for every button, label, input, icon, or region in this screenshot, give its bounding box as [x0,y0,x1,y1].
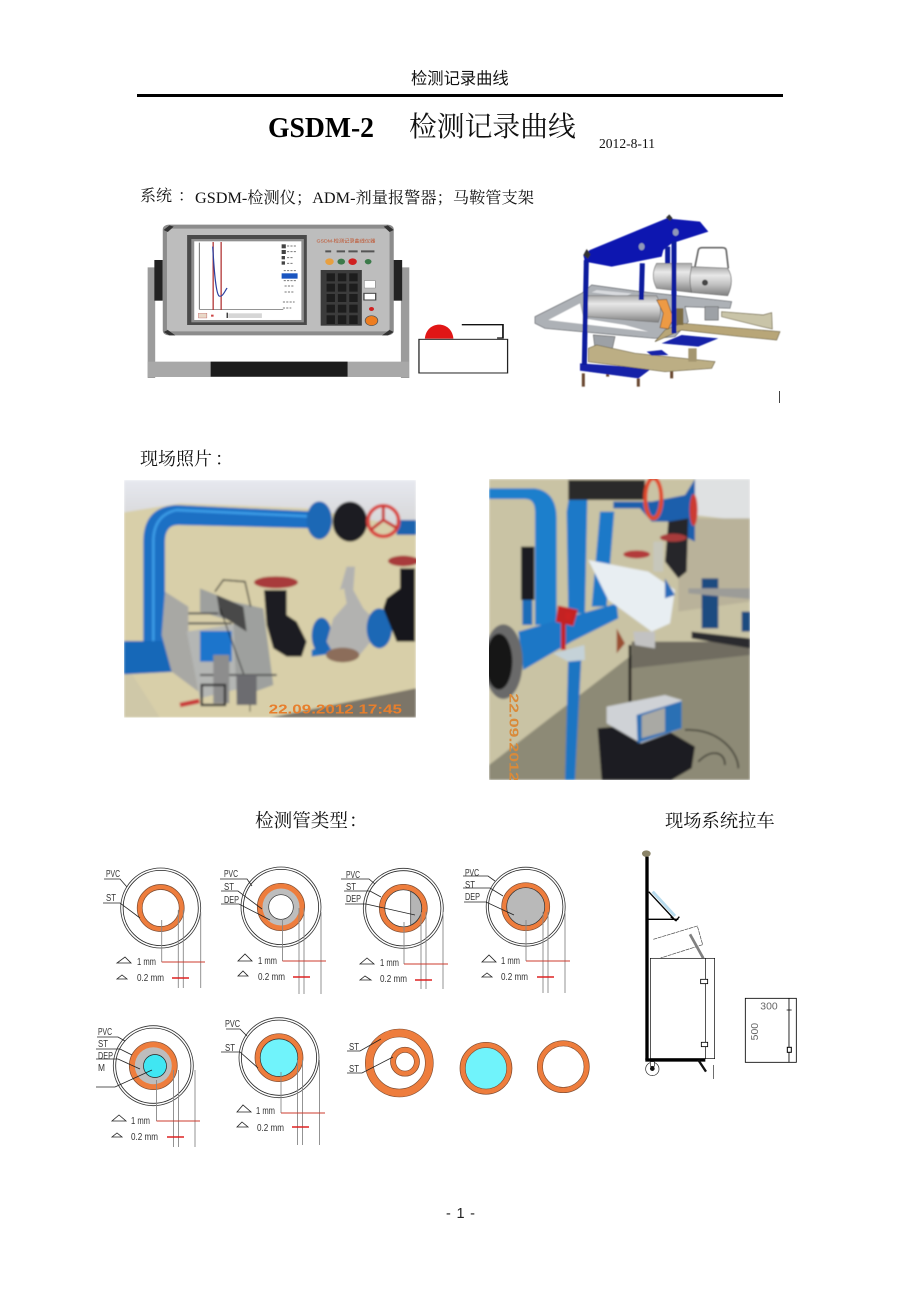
diagram: cart dimensions 300 by 500: 500 [750,1023,761,1040]
system description: 系统 [140,188,172,205]
diagram: field cart side view [642,850,715,1079]
title: GSDM-2 [268,113,374,144]
document page [96,70,797,1218]
small vertical tick [779,391,780,403]
photo: detector on pipe with instrument on floor: 22.09.2012 [507,693,521,782]
system description: GSDM-检测仪；ADM-剂量报警器；马鞍管支架 [195,188,534,207]
title: 检测记录曲线 [409,112,576,143]
diagram: cart dimensions 300 by 500: 300 [760,1002,778,1013]
diagram: steel pipe with deposit ring [220,867,326,994]
diagram: steel pipe filled with medium: 1 mm [256,1106,275,1117]
photo: bracket installed on blue pipe: 22.09.2012 17:45 [269,702,403,717]
pipe types heading: 检测管类型 [255,811,348,832]
diagram: steel pipe with deposit ring: 0.2 mm [258,972,285,983]
diagram: steel pipe fully deposited: 0.2 mm [501,972,528,983]
diagram: steel pipe with partial deposit: PVC [346,870,360,881]
page header: 检测记录曲线 [411,70,509,88]
diagram: steel pipe fully deposited: 1 mm [501,956,520,967]
diagram: steel pipe fully deposited: PVC [465,868,479,879]
diagram: steel pipe fully deposited [463,867,570,993]
diagram: steel pipe with deposit and medium: M [98,1063,105,1074]
diagram: empty steel pipe in PVC: 1 mm [137,957,156,968]
date: 2012-8-11 [599,137,655,152]
diagram: steel pipe filled with medium: ST [225,1043,235,1054]
field cart heading: 现场系统拉车 [665,811,775,831]
diagram: steel pipe with partial deposit: 0.2 mm [380,974,407,985]
diagram: empty steel ring [537,1041,589,1093]
icon: GSDM detector instrument [148,225,409,378]
diagram: steel pipe filled with medium: PVC [225,1019,240,1030]
diagram: empty steel pipe in PVC: PVC [106,869,120,880]
title [268,112,576,144]
diagram: concentric large and small steel pipes: ST [349,1042,359,1053]
icon: ADM dose alarm [419,325,508,373]
diagram: steel pipe with partial deposit: 1 mm [380,958,399,969]
diagram: steel pipe with deposit and medium: PVC [98,1027,112,1038]
diagram: steel pipe with partial deposit: DEP [346,894,361,905]
diagram: empty steel pipe in PVC: ST [106,893,116,904]
diagram: steel pipe fully deposited: ST [465,880,475,891]
diagram: steel pipe with deposit and medium: DEP [98,1051,113,1062]
diagram: steel pipe with deposit and medium: 0.2 mm [131,1132,158,1143]
icon: GSDM detector instrument: GSDM-检测记录曲线仪器 [316,237,376,244]
site photos heading: 现场照片 [140,449,212,469]
diagram: steel pipe filled with medium [221,1018,325,1145]
diagram: steel ring filled with medium [460,1042,512,1094]
photo: detector on pipe with instrument on floor [484,478,750,782]
diagram: concentric large and small steel pipes [347,1029,433,1097]
site photos heading: ： [215,449,233,469]
diagram: steel pipe with deposit and medium: 1 mm [131,1116,150,1127]
photo: bracket installed on blue pipe [124,480,419,718]
diagram: steel pipe filled with medium: 0.2 mm [257,1123,284,1134]
diagram: empty steel pipe in PVC [103,868,205,988]
diagram: steel pipe with deposit and medium: ST [98,1039,108,1050]
diagram: steel pipe with deposit ring: 1 mm [258,956,277,967]
diagram: concentric large and small steel pipes: ST [349,1064,359,1075]
diagram: steel pipe with partial deposit [341,868,448,989]
diagram: steel pipe with deposit ring: PVC [224,869,238,880]
diagram: steel pipe with partial deposit: ST [346,882,356,893]
diagram: empty steel pipe in PVC: 0.2 mm [137,973,164,984]
system description: ： [178,188,194,205]
diagram: steel pipe with deposit ring: ST [224,882,234,893]
diagram: steel pipe with deposit and medium [96,1026,200,1147]
icon: saddle pipe bracket [535,214,780,387]
page number: - 1 - [446,1206,475,1222]
diagram: steel pipe with deposit ring: DEP [224,895,239,906]
pipe types heading: ： [349,811,368,832]
diagram: steel pipe fully deposited: DEP [465,892,480,903]
diagram: cart dimensions 300 by 500 [745,998,796,1062]
